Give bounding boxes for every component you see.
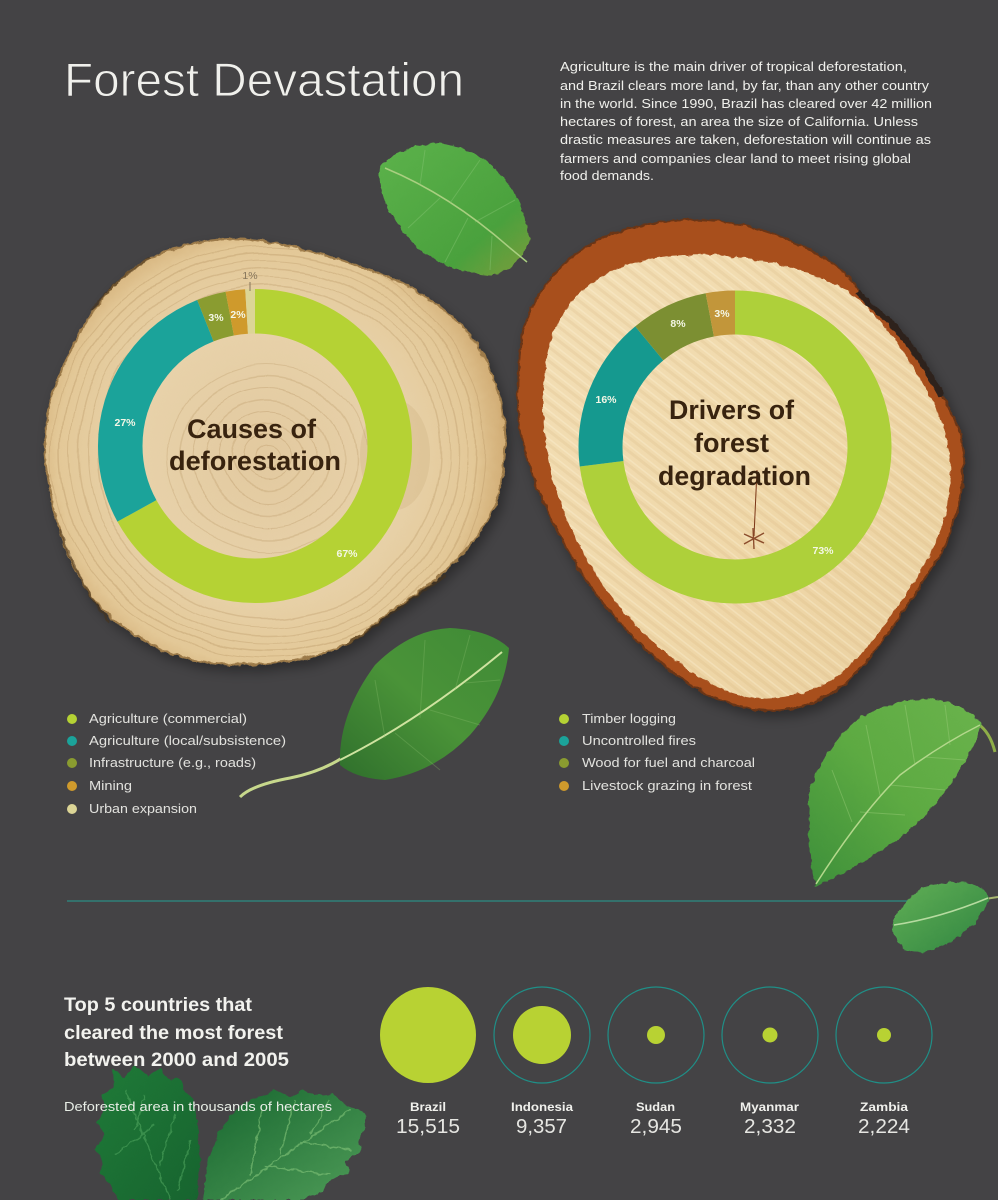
icon: small right leaf xyxy=(892,882,998,953)
heading: top 5 countries: Top 5 countries that xyxy=(64,994,253,1016)
bubble: Zambia: 2,224 xyxy=(858,1116,910,1138)
percent labels: drivers: 8% xyxy=(670,318,686,330)
legend: causes: Agriculture (local/subsistence) xyxy=(89,733,286,748)
percent labels: causes xyxy=(114,270,358,560)
icon: right leaf xyxy=(808,699,995,887)
intro text block: hectares of forest, an area the size of California. Unless xyxy=(560,114,919,129)
centre heading: causes: Causes of xyxy=(187,414,317,444)
legend: causes: Mining xyxy=(89,778,132,793)
percent labels: causes: 1% xyxy=(242,270,258,282)
intro text block: in the world. Since 1990, Brazil has cleared over 42 million xyxy=(560,96,932,111)
legend: drivers: Uncontrolled fires xyxy=(582,733,697,748)
leaf: bottom left one xyxy=(95,1065,200,1200)
wood slice: right xyxy=(518,220,963,711)
panel: drivers of forest degradation xyxy=(518,220,963,711)
bubble: Zambia: Zambia xyxy=(860,1100,908,1114)
icon: top leaf xyxy=(380,143,530,276)
wood slice: left xyxy=(45,239,505,665)
intro text block: food demands. xyxy=(560,168,654,183)
panel: causes of deforestation xyxy=(45,239,505,665)
intro text block: and Brazil clears more land, by far, than any other country xyxy=(560,78,930,93)
heading: top 5 countries: between 2000 and 2005 xyxy=(64,1049,289,1071)
bubble: Myanmar xyxy=(722,987,818,1138)
wood pith crack xyxy=(744,470,764,549)
centre heading: drivers: forest xyxy=(694,428,769,458)
legend: causes: Infrastructure (e.g., roads) xyxy=(89,755,256,770)
heading: top 5 countries: cleared the most forest xyxy=(64,1022,284,1044)
percent labels: causes: 2% xyxy=(230,309,246,321)
bubble: Sudan xyxy=(608,987,704,1138)
centre heading: causes xyxy=(169,414,341,476)
bark edge: left slice xyxy=(60,258,445,645)
percent labels: drivers: 16% xyxy=(595,394,617,406)
legend: causes: Urban expansion xyxy=(89,801,197,816)
percent labels: causes: 27% xyxy=(114,417,136,429)
bubble: Zambia xyxy=(836,987,932,1138)
centre heading: causes: deforestation xyxy=(169,446,341,476)
percent labels: drivers: 3% xyxy=(714,308,730,320)
bubble: Sudan: 2,945 xyxy=(630,1116,682,1138)
centre heading: drivers: Drivers of xyxy=(669,395,795,425)
icon: bottom left leaves xyxy=(95,1065,366,1200)
legend: drivers: Wood for fuel and charcoal xyxy=(582,755,755,770)
bubble: Sudan: Sudan xyxy=(636,1100,675,1114)
intro text block: farmers and companies clear land to meet rising global xyxy=(560,151,911,166)
legend: drivers xyxy=(559,711,755,793)
intro text block: Agriculture is the main driver of tropical deforestation, xyxy=(560,59,907,74)
percent labels: drivers: 73% xyxy=(812,545,834,557)
leaf: bottom left two xyxy=(203,1090,366,1200)
centre heading: drivers: degradation xyxy=(658,461,811,491)
intro text block: drastic measures are taken, deforestation will continue as xyxy=(560,132,932,147)
heading: top 5 countries xyxy=(64,994,289,1071)
legend: causes: Agriculture (commercial) xyxy=(89,711,247,726)
bubble: Myanmar: 2,332 xyxy=(744,1116,796,1138)
percent labels: causes: 3% xyxy=(208,312,224,324)
intro text block xyxy=(560,59,932,183)
bubble: Brazil: 15,515 xyxy=(396,1116,460,1138)
legend: drivers: Livestock grazing in forest xyxy=(582,778,752,793)
percent labels: causes: 67% xyxy=(336,548,358,560)
centre heading: drivers xyxy=(658,395,811,491)
legend: causes xyxy=(67,711,286,816)
title: Forest Devastation xyxy=(64,53,464,106)
icon: middle leaf xyxy=(240,628,509,797)
subtitle: unit note: Deforested area in thousands of hectares xyxy=(64,1100,332,1114)
bubble: Myanmar: Myanmar xyxy=(740,1100,799,1114)
bubble: Indonesia xyxy=(494,987,590,1138)
bubble: Indonesia: Indonesia xyxy=(511,1100,573,1114)
donut chart: drivers xyxy=(600,312,870,582)
bubble: Brazil xyxy=(380,987,476,1138)
percent labels: drivers xyxy=(595,308,834,557)
bubble: Indonesia: 9,357 xyxy=(516,1116,567,1138)
donut chart: causes xyxy=(120,311,390,581)
legend: drivers: Timber logging xyxy=(582,711,676,726)
bubble: Brazil: Brazil xyxy=(410,1100,446,1114)
